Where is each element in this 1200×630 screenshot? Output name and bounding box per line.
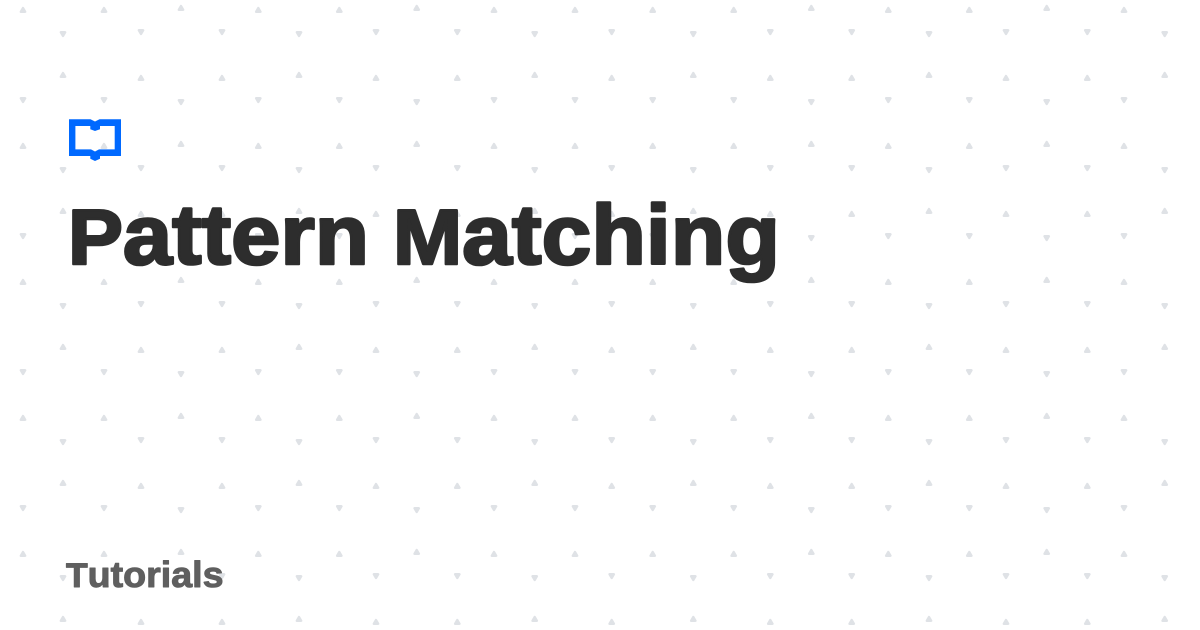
category label: Tutorials bbox=[66, 554, 224, 595]
icon: open book bbox=[69, 119, 121, 161]
title: Matching bbox=[393, 188, 761, 282]
title: Pattern bbox=[68, 188, 356, 282]
